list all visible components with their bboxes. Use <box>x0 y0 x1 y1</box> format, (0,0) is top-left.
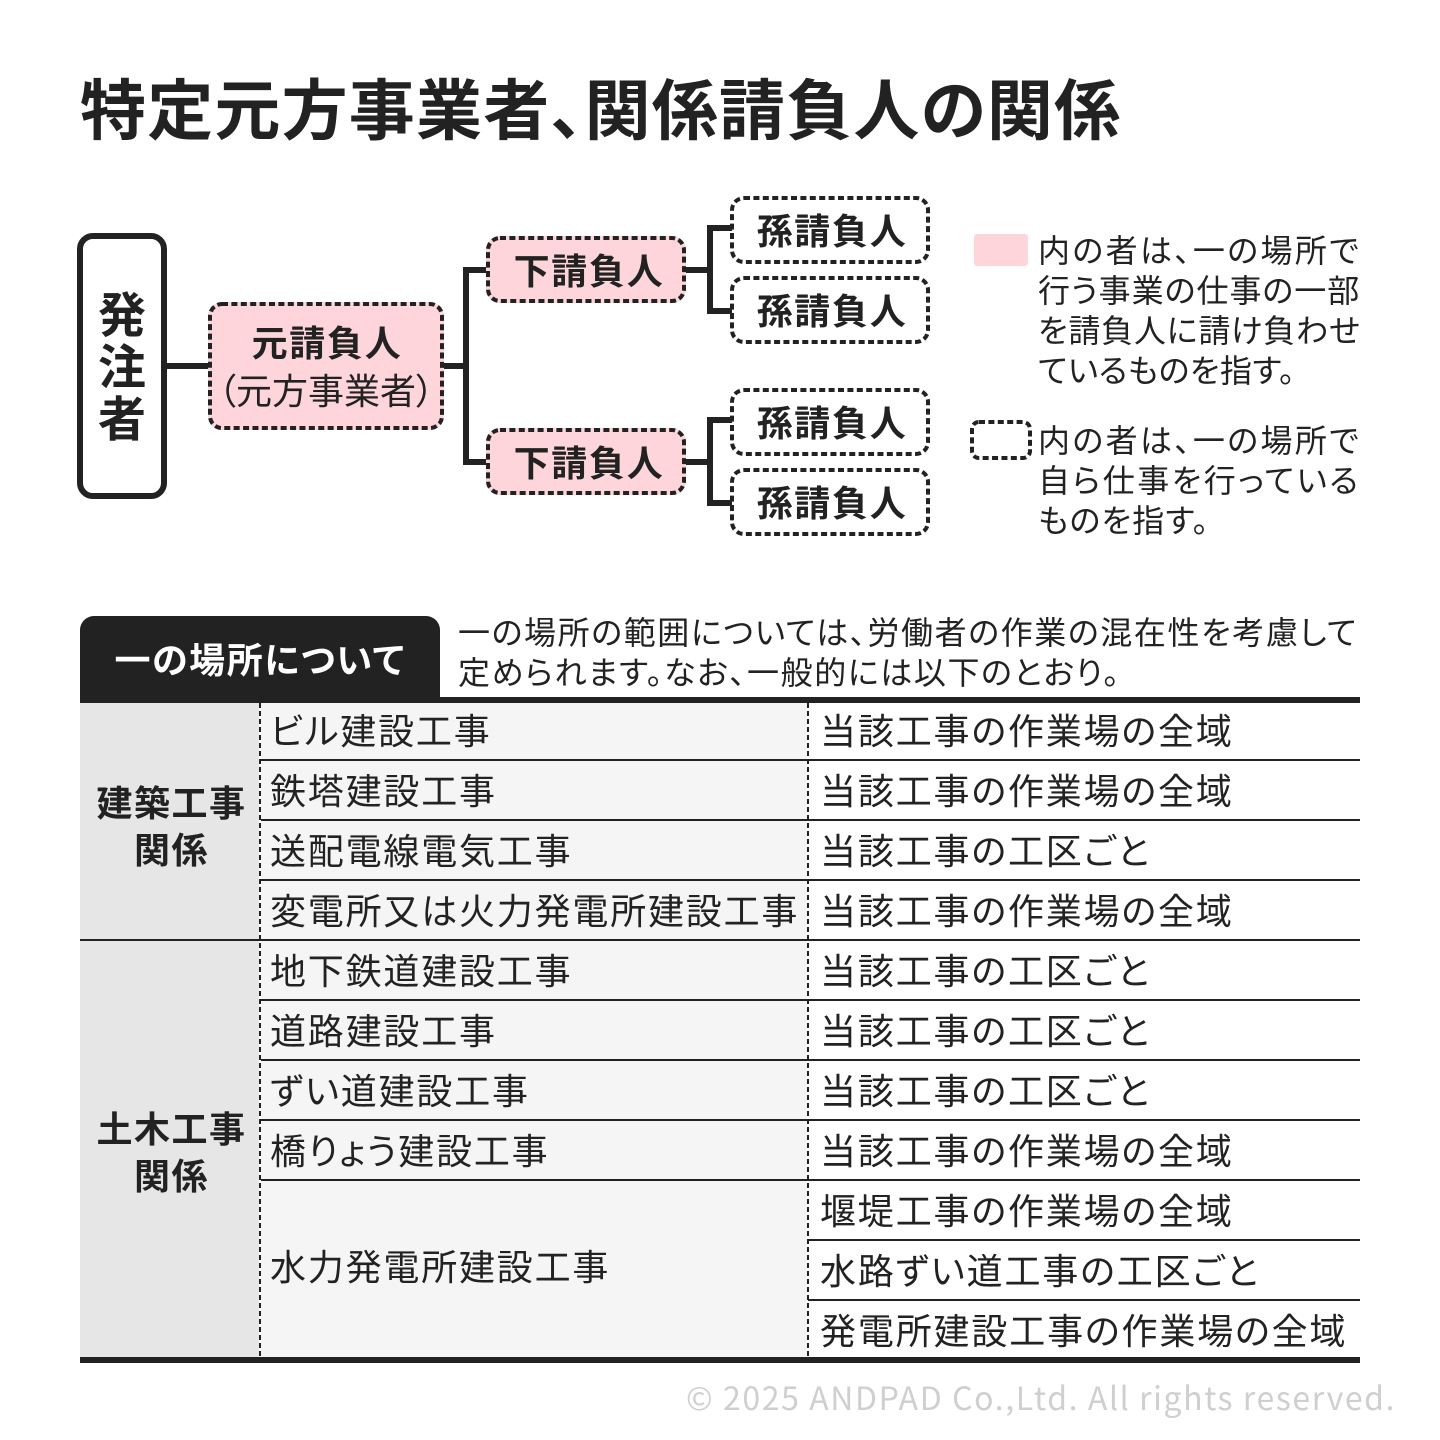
table work names: ずい道建設工事 <box>270 1071 530 1112</box>
org chart <box>77 196 930 536</box>
box: 孫請負人 3 <box>730 388 930 456</box>
box: 下請負人 下: 下請負人 <box>514 442 664 484</box>
table scope of place: 当該工事の工区ごと <box>820 951 1151 992</box>
box: 孫請負人 3: 孫請負人 <box>757 402 907 444</box>
table scope of place <box>820 711 1347 1352</box>
table work names: 変電所又は火力発電所建設工事 <box>270 891 799 932</box>
legend text: pink: 内の者は、一の場所で <box>1038 233 1361 269</box>
box: 下請負人 下 <box>486 428 686 495</box>
section heading <box>80 616 440 702</box>
table work names: ビル建設工事 <box>270 711 492 752</box>
legend text: pink <box>1038 233 1361 389</box>
box: 発注者: 者 <box>98 394 146 447</box>
table category: 土木工事関係 <box>80 941 259 1357</box>
section description <box>458 615 1358 691</box>
table category: 土木工事関係: 関係 <box>134 1156 209 1197</box>
table scope of place: 発電所建設工事の作業場の全域 <box>820 1311 1347 1352</box>
box: 孫請負人 4 <box>730 468 930 536</box>
box: 元請負人: 元請負人 <box>252 323 402 364</box>
box: 孫請負人 4: 孫請負人 <box>757 482 907 524</box>
section description: 定められます。なお、一般的には以下のとおり。 <box>458 655 1121 691</box>
box: 下請負人 上 <box>486 236 686 303</box>
table work names: 橋りょう建設工事 <box>270 1131 549 1172</box>
table work names: 水力発電所建設工事 <box>270 1247 610 1288</box>
table scope of place: 水路ずい道工事の工区ごと <box>820 1251 1260 1292</box>
table scope of place: 当該工事の作業場の全域 <box>820 1131 1234 1172</box>
section heading: 一の場所について <box>114 640 406 681</box>
legend text: dashed: ものを指す。 <box>1038 503 1210 539</box>
section description: 一の場所の範囲については、労働者の作業の混在性を考慮して <box>458 615 1358 651</box>
copyright: © 2025 ANDPAD Co.,Ltd. All rights reserved. <box>686 1374 1396 1420</box>
box: 発注者: 発 <box>98 290 146 343</box>
title: 特定元方事業者、関係請負人の関係 <box>80 74 1121 148</box>
table scope of place: 当該工事の作業場の全域 <box>820 771 1234 812</box>
connector lines <box>167 225 732 506</box>
legend: dashed swatch <box>970 420 1032 460</box>
legend text: dashed <box>1038 423 1361 539</box>
table category: 建築工事関係: 建築工事 <box>96 783 246 824</box>
box: 孫請負人 1 <box>730 196 930 264</box>
table category: 建築工事関係 <box>80 703 259 940</box>
box: 発注者: 注 <box>98 342 146 395</box>
legend text: pink: を請負人に請け負わせ <box>1038 313 1361 349</box>
box: 元請負人: （元方事業者） <box>218 371 434 412</box>
box: 下請負人 上: 下請負人 <box>514 250 664 292</box>
legend text: pink: ているものを指す。 <box>1038 353 1295 389</box>
legend text: dashed: 内の者は、一の場所で <box>1038 423 1361 459</box>
table scope of place: 当該工事の作業場の全域 <box>820 711 1234 752</box>
box: 発注者 <box>77 233 167 499</box>
table middle column background <box>261 703 807 1357</box>
table work names: 鉄塔建設工事 <box>270 771 497 812</box>
box: 孫請負人 1: 孫請負人 <box>757 210 907 252</box>
table scope of place: 当該工事の工区ごと <box>820 831 1151 872</box>
table category: 土木工事関係: 土木工事 <box>96 1109 246 1150</box>
table work names: 地下鉄道建設工事 <box>270 951 572 992</box>
box: 元請負人 <box>208 302 444 430</box>
box: 孫請負人 2: 孫請負人 <box>757 290 907 332</box>
legend text: dashed: 自ら仕事を行っている <box>1038 463 1361 499</box>
table scope of place: 当該工事の工区ごと <box>820 1071 1151 1112</box>
table category: 建築工事関係: 関係 <box>134 830 209 871</box>
table scope of place: 堰堤工事の作業場の全域 <box>820 1191 1234 1232</box>
legend: pink swatch <box>974 234 1028 266</box>
box: 孫請負人 2 <box>730 276 930 344</box>
table scope of place: 当該工事の工区ごと <box>820 1011 1151 1052</box>
table work names: 道路建設工事 <box>270 1011 497 1052</box>
table work names <box>270 711 799 1288</box>
table work names: 送配電線電気工事 <box>270 831 572 872</box>
table scope of place: 当該工事の作業場の全域 <box>820 891 1234 932</box>
legend text: pink: 行う事業の仕事の一部 <box>1038 273 1360 309</box>
